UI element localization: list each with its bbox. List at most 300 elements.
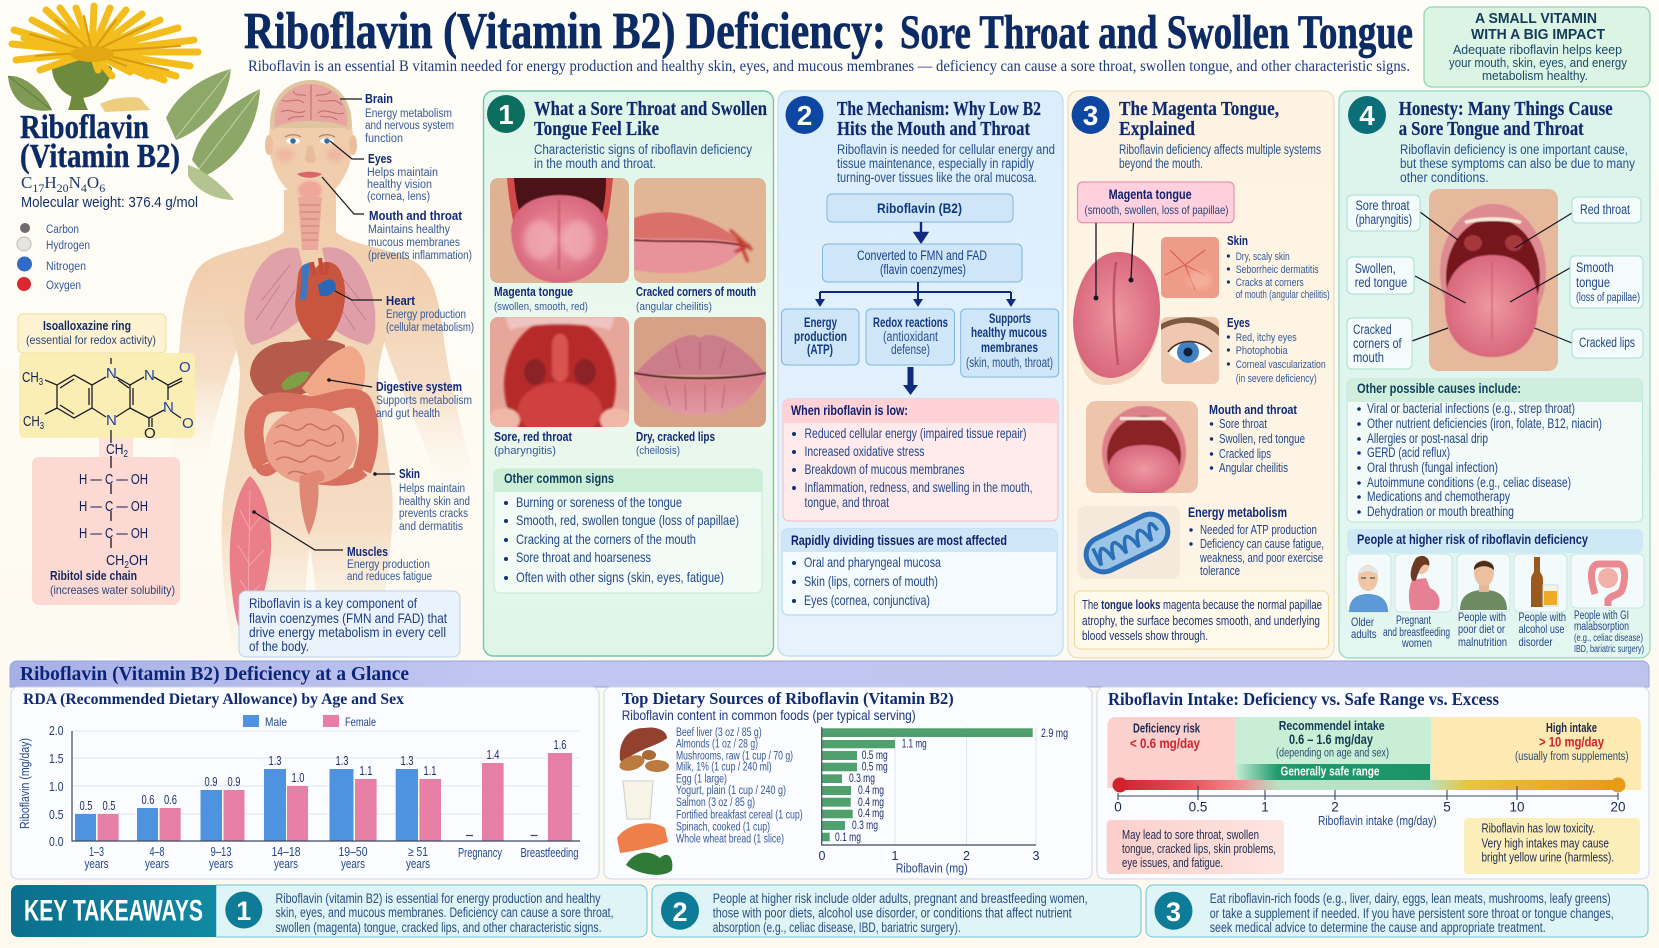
panel: ribitol side chain: (increases water solubility) (50, 583, 175, 597)
photo: dry cracked lips (634, 317, 766, 427)
intake scale: Riboflavin intake (mg/day) (1318, 814, 1436, 828)
sources bar chart: 0.1 mg (835, 832, 861, 844)
note: deficiency effects: May lead to sore throat, swollen (1122, 828, 1259, 842)
flow: mucous membranes: healthy mucous (971, 325, 1047, 340)
text: energy metabolism: tolerance (1200, 564, 1240, 578)
rda legend: Female (345, 715, 376, 729)
zone: deficiency risk (1107, 717, 1235, 788)
heading: riboflavin: (Vitamin B2) (20, 138, 180, 175)
molecule: isoalloxazine ring structure: CH (22, 369, 44, 386)
label: skin: Skin (399, 467, 420, 481)
panel: dietary sources (604, 687, 1092, 879)
zone: high intake: High intake (1546, 721, 1597, 735)
icon: pregnant woman (1395, 554, 1452, 612)
molecule: isoalloxazine ring structure: O (144, 425, 156, 442)
legend: atoms: Oxygen (46, 280, 81, 292)
molecule: isoalloxazine ring structure (19, 353, 195, 548)
flow: energy production: production (794, 329, 847, 344)
caption: sore red throat (494, 430, 573, 457)
flow: conversion box: Converted to FMN and FAD (857, 248, 987, 263)
takeaway 1 (216, 885, 647, 937)
panel 2 intro: tissue maintenance, especially in rapidly (837, 156, 1034, 171)
flow: riboflavin box (827, 194, 1013, 222)
sources bar chart: 0.4 mg (858, 808, 884, 820)
flow: energy production (782, 309, 859, 365)
chemical formula and molecular weight: C (21, 173, 32, 192)
callout: a small vitamin (1424, 7, 1650, 87)
rda bar chart: years (84, 856, 109, 871)
label: red throat (1572, 197, 1641, 223)
caption: gi malabsorption (1574, 610, 1644, 655)
callout: a small vitamin: WITH A BIG IMPACT (1471, 26, 1605, 43)
flow: conversion box (822, 244, 1022, 282)
text: eyes: (in severe deficiency) (1236, 373, 1317, 385)
food labels: Milk, 1% (1 cup / 240 ml) (676, 762, 772, 774)
icon: older adults (1346, 554, 1391, 612)
flow: redox reactions: defense) (891, 342, 930, 357)
box: rapidly dividing tissues: Eyes (cornea, conjunctiva) (804, 592, 930, 608)
caption: magenta tongue: Magenta tongue (494, 285, 573, 299)
label: smooth tongue: (loss of papillae) (1576, 292, 1640, 304)
rda bar chart: 0.0 (49, 835, 64, 849)
panel 4 heading: a Sore Tongue and Throat (1399, 118, 1584, 140)
caption: pregnant: women (1401, 638, 1432, 650)
rda bar chart: 0.5 (49, 808, 64, 822)
label: heart: Heart (386, 294, 416, 308)
food labels: Fortified breakfast cereal (1 cup) (676, 809, 803, 821)
text: energy metabolism: Deficiency can cause fatigue, (1200, 537, 1324, 551)
intake scale: 5 (1443, 800, 1451, 815)
panel 3 intro: Riboflavin deficiency affects multiple systems (1119, 142, 1321, 157)
label: sore throat: Sore throat (1356, 198, 1410, 213)
caption: alcohol: alcohol use (1518, 622, 1565, 636)
sources bar chart: 0.4 mg (858, 785, 884, 797)
chemical formula and molecular weight: 6 (99, 181, 105, 195)
flow: riboflavin box: Riboflavin (B2) (877, 200, 962, 216)
zone: recommended intake: 0.6 – 1.6 mg/day (1289, 731, 1373, 747)
box: rapidly dividing tissues (782, 529, 1057, 615)
panel 3 intro (1119, 142, 1321, 171)
takeaway 1: skin, eyes, and mucous membranes. Deficiency can cause a sore throat, (276, 905, 614, 920)
label: digestive system: Supports metabolism (376, 395, 472, 407)
molecule: isoalloxazine ring structure: CH (23, 413, 45, 430)
photo: sore red throat (490, 317, 629, 427)
callout: flavin coenzymes: Riboflavin is a key component of (249, 595, 417, 611)
food labels: Salmon (3 oz / 85 g) (676, 797, 755, 809)
rda legend (243, 715, 376, 729)
photo: eye (1161, 317, 1219, 384)
rda bar chart (18, 724, 580, 871)
panel 3 heading: Explained (1119, 118, 1196, 140)
text: skin (1227, 234, 1330, 301)
caption: poor diet: poor diet or (1458, 622, 1505, 636)
label: cracked corners of mouth: Cracked (1353, 322, 1392, 337)
caption: magenta tongue (494, 285, 588, 313)
sources bar chart: 0.5 mg (862, 762, 888, 774)
caption: poor diet: People with (1458, 610, 1506, 624)
panel: intake ranges (1097, 687, 1649, 879)
sources bar chart: 1 (892, 849, 899, 863)
panel 4 intro (1400, 142, 1635, 185)
panel 4 intro: other conditions. (1400, 170, 1489, 185)
panel 2 heading: Hits the Mouth and Throat (837, 118, 1030, 140)
chemical formula and molecular weight: 20 (57, 181, 69, 195)
panel 1 intro: Characteristic signs of riboflavin deficiency (534, 142, 752, 157)
sources bar chart: 0.5 mg (862, 750, 888, 762)
note: low toxicity: bright yellow urine (harmless). (1482, 851, 1614, 865)
takeaway 3: seek medical advice to determine the cause and appropriate treatment. (1210, 920, 1546, 935)
rda bar chart: 0.6 (164, 793, 177, 807)
caption: older adults (1351, 615, 1377, 641)
text: energy metabolism (1188, 505, 1324, 578)
box: other common signs: Smooth, red, swollen tongue (loss of papillae) (516, 512, 739, 528)
title: Riboflavin (Vitamin B2) Deficiency: (244, 3, 886, 60)
panel 2 heading: The Mechanism: Why Low B2 (837, 98, 1041, 120)
caption: pregnant: and breastfeeding (1383, 627, 1450, 639)
chemical formula and molecular weight: 17 (32, 181, 44, 195)
caption: poor diet (1458, 610, 1507, 649)
label: eyes: (cornea, lens) (367, 191, 430, 203)
panel: ribitol side chain: H — C — OH (79, 525, 148, 542)
flow: redox reactions: Redox reactions (873, 315, 948, 330)
box: other possible causes (1347, 379, 1642, 522)
molecule: isoalloxazine ring structure: O (179, 359, 191, 376)
label: brain: Energy metabolism (365, 108, 452, 120)
label: brain (365, 92, 454, 145)
takeaway 1: 1 (236, 896, 251, 926)
rda bar chart: 1.6 (554, 738, 567, 752)
panel: ribitol side chain: 2 (124, 560, 129, 571)
box: other possible causes: Allergies or post-nasal drip (1367, 431, 1488, 446)
legend: atoms: Hydrogen (46, 240, 90, 252)
takeaway 1: Riboflavin (vitamin B2) is essential for energy production and healthy (276, 891, 601, 906)
illustration: magenta tongue (1073, 223, 1160, 385)
rda heading: RDA (Recommended Dietary Allowance) by Age and Sex (23, 691, 404, 708)
text: skin: Skin (1227, 234, 1248, 248)
rda bar chart: years (209, 856, 233, 871)
label: skin (399, 467, 470, 533)
rda bar chart: Riboflavin (mg/day) (18, 738, 32, 829)
rda bar chart: 1.0 (49, 780, 64, 794)
text: mouth and throat: Swollen, red tongue (1219, 432, 1305, 446)
takeaway 2: 2 (672, 897, 688, 927)
panel 2: the mechanism (778, 91, 1063, 656)
caption: alcohol: People with (1518, 610, 1566, 624)
rda bar chart: 1.0 (292, 771, 305, 785)
illustration: mitochondrion (1077, 505, 1180, 581)
caption: dry cracked lips: Dry, cracked lips (636, 430, 715, 444)
caption: magenta tongue: (swollen, smooth, red) (494, 301, 588, 313)
caption: gi malabsorption: malabsorption (1574, 621, 1629, 633)
sources bar chart: 0.3 mg (849, 773, 875, 785)
box: when riboflavin is low: Increased oxidative stress (804, 443, 924, 459)
rda bar chart: years (274, 856, 298, 871)
panel 3 heading: The Magenta Tongue, (1119, 98, 1279, 120)
arrow: to low riboflavin (903, 367, 918, 395)
zone: recommended intake: Recommendel intake (1279, 719, 1385, 733)
label: cracked corners of mouth: mouth (1353, 350, 1384, 365)
label: brain: and nervous system (365, 120, 454, 132)
rda bar chart: 14–18 (272, 844, 300, 859)
zone: deficiency risk: < 0.6 mg/day (1130, 735, 1200, 751)
box: other possible causes: Other possible causes include: (1357, 380, 1521, 396)
panel 4 intro: Riboflavin deficiency is one important cause, (1400, 142, 1628, 157)
molecule: isoalloxazine ring structure: N (163, 399, 174, 416)
sources bar chart (819, 727, 1068, 876)
box: other common signs (494, 469, 762, 593)
panel 1 heading: Tongue Feel Like (534, 118, 659, 140)
leader lines: mouth labels (1412, 212, 1572, 343)
food labels: Almonds (1 oz / 28 g) (676, 739, 758, 751)
label: muscles (347, 545, 432, 583)
intake heading: Riboflavin Intake: Deficiency vs. Safe Range vs. Excess (1108, 689, 1499, 709)
rda bar chart: 0.9 (228, 775, 241, 789)
box: other common signs: Sore throat and hoarseness (516, 549, 651, 565)
rda bar chart: Pregnancy (458, 845, 502, 860)
rda bar chart: 0.5 (102, 799, 116, 813)
label: heart: Energy production (386, 309, 466, 321)
illustration: human anatomy (172, 80, 475, 650)
photo: skin (1161, 237, 1219, 298)
box: other possible causes: GERD (acid reflux) (1367, 445, 1450, 460)
badge 2: 2 (797, 100, 812, 131)
caption: gi malabsorption: People with GI (1574, 610, 1629, 622)
callout: why the tongue looks magenta: atrophy, the surface becomes smooth, and underlying (1082, 614, 1320, 628)
rda bar chart: 4–8 (150, 844, 164, 859)
caption: older adults: adults (1351, 627, 1377, 641)
box: when riboflavin is low (783, 399, 1058, 521)
section heading: at a glance (10, 661, 1649, 687)
intake scale: 10 (1509, 800, 1525, 815)
photo: mouth and throat (1086, 401, 1198, 498)
panel: rda chart (11, 687, 599, 879)
rda bar chart: ≥ 51 (408, 844, 428, 859)
header: people at higher risk (1347, 529, 1643, 553)
box: rapidly dividing tissues: Skin (lips, corners of mouth) (804, 573, 938, 589)
rda bar chart: years (341, 856, 365, 871)
panel 1: what a sore throat feels like (484, 91, 774, 656)
takeaway 3: 3 (1166, 897, 1181, 927)
molecule: isoalloxazine ring structure: 3 (39, 377, 43, 388)
callout: flavin coenzymes: flavin coenzymes (FMN and FAD) that (249, 610, 447, 626)
callout: flavin coenzymes: drive energy metabolism in every cell (249, 624, 446, 640)
flow: mucous membranes: Supports (989, 311, 1031, 326)
label: red throat: Red throat (1580, 202, 1630, 217)
chemical formula and molecular weight: H (44, 173, 57, 192)
callout: a small vitamin: your mouth, skin, eyes, and energy (1449, 55, 1627, 70)
caption: cracked corners (636, 285, 756, 313)
flow: redox reactions (866, 309, 954, 365)
legend: atoms: Nitrogen (46, 261, 86, 273)
takeaway 1: swollen (magenta) tongue, cracked lips, and other characteristic signs. (276, 920, 602, 935)
takeaway 2: absorption (e.g., celiac disease, IBD, bariatric surgery). (713, 920, 961, 935)
box: other possible causes: Dehydration or mouth breathing (1367, 504, 1514, 519)
box: other possible causes: Medications and chemotherapy (1367, 489, 1510, 504)
box: other common signs: Burning or soreness of the tongue (516, 494, 682, 510)
caption: sore red throat: Sore, red throat (494, 430, 573, 444)
panel 2 intro: turning-over tissues like the oral mucosa. (837, 170, 1037, 185)
text: skin: Seborrheic dermatitis (1236, 264, 1319, 276)
photo: magenta tongue (490, 178, 629, 283)
molecule: isoalloxazine ring structure: 3 (40, 421, 44, 432)
label: swollen red tongue: Swollen, (1355, 261, 1396, 276)
rda bar chart: 1.1 (424, 764, 437, 778)
label: mouth and throat (368, 209, 472, 262)
box: when riboflavin is low: Inflammation, redness, and swelling in the mouth, (804, 479, 1032, 495)
box: other common signs: Other common signs (504, 470, 614, 486)
box: other possible causes: Oral thrush (fungal infection) (1367, 460, 1498, 475)
zone: deficiency risk: Deficiency risk (1133, 722, 1200, 736)
intake scale: 0.5 (1189, 800, 1207, 815)
rda bar chart: 1–3 (89, 844, 104, 859)
isoalloxazine ring label: (essential for redox activity) (26, 333, 156, 347)
food labels: Egg (1 large) (676, 773, 727, 785)
panel: ribitol side chain: OH (129, 552, 148, 569)
text: skin: of mouth (angular cheilitis) (1236, 289, 1330, 301)
badge 4 (1348, 96, 1386, 134)
label: digestive system: Digestive system (376, 380, 462, 394)
arrow: to conversion (915, 222, 927, 242)
sources heading: Top Dietary Sources of Riboflavin (Vitamin B2) (622, 689, 954, 708)
chemical formula and molecular weight: N (69, 173, 81, 192)
panel 4: many things cause a sore tongue (1339, 91, 1650, 658)
caption: dry cracked lips (636, 430, 715, 457)
caption: alcohol: disorder (1518, 635, 1552, 649)
panel 1 intro: in the mouth and throat. (534, 156, 656, 171)
isoalloxazine ring label (18, 314, 166, 353)
label: skin: and dermatitis (399, 521, 463, 533)
text: skin: Dry, scaly skin (1236, 251, 1290, 263)
rda legend: Male (265, 715, 287, 729)
label: cracked corners of mouth: corners of (1353, 336, 1402, 351)
legend: atoms (17, 223, 90, 292)
panel 3: the magenta tongue (1068, 91, 1334, 658)
caption: poor diet: malnutrition (1458, 635, 1507, 649)
label: smooth tongue: Smooth (1576, 260, 1614, 275)
rda bar chart: 19–50 (338, 844, 368, 859)
box: other common signs: Often with other signs (skin, eyes, fatigue) (516, 569, 724, 585)
intake scale: 0 (1114, 800, 1122, 815)
sources bar chart: Riboflavin (mg) (896, 862, 968, 876)
callout: flavin coenzymes: of the body. (249, 638, 309, 654)
zone: recommended intake (1235, 717, 1431, 790)
panel 2 heading (837, 98, 1041, 140)
label: magenta tongue: (smooth, swollen, loss of papillae) (1084, 203, 1228, 217)
intake scale: 2 (1331, 800, 1339, 815)
label: mouth and throat: (prevents inflammation) (368, 250, 472, 262)
text: mouth and throat: Mouth and throat (1209, 403, 1298, 417)
takeaway 2 (652, 885, 1141, 937)
molecule: isoalloxazine ring structure: N (106, 412, 117, 429)
rda bar chart: 1.5 (49, 752, 64, 766)
molecule: isoalloxazine ring structure: N (106, 365, 117, 382)
label: skin: Helps maintain (399, 483, 465, 495)
flow: mucous membranes: (skin, mouth, throat) (966, 355, 1053, 370)
title (244, 3, 1413, 60)
note: deficiency effects: tongue, cracked lips, skin problems, (1122, 842, 1276, 856)
intake scale: 1 (1261, 800, 1269, 815)
label: digestive system (376, 380, 472, 420)
intake scale (1112, 778, 1626, 828)
badge 4: 4 (1359, 100, 1375, 131)
intake scale: 20 (1610, 800, 1626, 815)
note: deficiency effects: eye issues, and fatigue. (1122, 856, 1223, 870)
rda bar chart: years (145, 856, 169, 871)
label: brain: function (365, 133, 403, 145)
text: eyes: Photophobia (1236, 345, 1288, 357)
sources bar chart: 3 (1033, 849, 1040, 863)
subtitle: Riboflavin is an essential B vitamin needed for energy production and healthy skin, eyes, and mucous membranes — deficiency can cause a sore throat, swollen tongue, and other characteristic signs. (248, 58, 1410, 75)
text: mouth and throat: Sore throat (1219, 417, 1267, 431)
sources bar chart: 2 (963, 849, 970, 863)
photo: open mouth with tongue (1429, 189, 1558, 371)
rda bar chart: 1.3 (268, 754, 282, 768)
flow: mucous membranes: membranes (981, 340, 1038, 355)
chemical formula and molecular weight: Molecular weight: 376.4 g/mol (21, 194, 198, 211)
callout: a small vitamin: A SMALL VITAMIN (1475, 10, 1597, 27)
note: low toxicity: Very high intakes may cause (1482, 837, 1609, 851)
takeaway 3 (1146, 885, 1648, 937)
zone: high intake: > 10 mg/day (1539, 734, 1604, 750)
sources bar chart: 1.1 mg (902, 739, 927, 751)
label: cracked lips (1572, 329, 1643, 358)
label: smooth tongue: tongue (1576, 275, 1610, 290)
text: mouth and throat: Cracked lips (1219, 447, 1271, 461)
molecule: isoalloxazine ring structure: N (144, 367, 155, 384)
flow: redox reactions: (antioxidant (883, 329, 938, 344)
label: heart: (cellular metabolism) (386, 322, 474, 334)
caption: pregnant: Pregnant (1396, 615, 1432, 627)
icons: foods (617, 727, 672, 875)
label: skin: healthy skin and (399, 496, 470, 508)
chemical formula and molecular weight (21, 173, 198, 211)
section heading: at a glance: Riboflavin (Vitamin B2) Deficiency at a Glance (20, 663, 409, 685)
sources subtitle: Riboflavin content in common foods (per typical serving) (622, 708, 916, 723)
flow: mucous membranes (961, 309, 1059, 377)
note: low toxicity (1464, 818, 1640, 874)
flow: conversion box: (flavin coenzymes) (880, 262, 966, 277)
caption: cracked corners: (angular cheilitis) (636, 301, 712, 313)
caption: pregnant (1383, 615, 1450, 650)
box: when riboflavin is low: tongue, and throat (804, 494, 889, 510)
panel 4 heading (1399, 98, 1613, 140)
sources bar chart: 2.9 mg (1041, 728, 1068, 740)
header: people at higher risk: People at higher risk of riboflavin deficiency (1357, 531, 1588, 547)
food labels: Spinach, cooked (1 cup) (676, 821, 770, 833)
food labels (676, 727, 803, 846)
label: sore throat: (pharyngitis) (1356, 212, 1412, 227)
text: energy metabolism: weakness, and poor exercise (1199, 551, 1323, 565)
food labels: Whole wheat bread (1 slice) (676, 834, 784, 846)
note: deficiency effects (1107, 820, 1284, 874)
label: eyes: Helps maintain (367, 167, 438, 179)
panel: ribitol side chain: H — C — OH (79, 498, 148, 515)
chemical formula and molecular weight: 4 (81, 181, 87, 195)
panel: ribitol side chain: Ribitol side chain (50, 569, 137, 583)
panel: ribitol side chain: CH (106, 552, 128, 569)
box: other possible causes: Viral or bacterial infections (e.g., strep throat) (1367, 401, 1575, 416)
text: eyes: Corneal vascularization (1236, 359, 1326, 371)
label: cracked corners of mouth (1347, 318, 1412, 369)
callout: why the tongue looks magenta (1074, 591, 1328, 649)
isoalloxazine ring label: Isoalloxazine ring (43, 319, 131, 333)
text: skin: Cracks at corners (1236, 277, 1304, 289)
rda bar chart: 1.4 (486, 748, 500, 762)
sources bar chart: 0.4 mg (858, 797, 884, 809)
box: other common signs: Cracking at the corners of the mouth (516, 531, 696, 547)
caption: sore red throat: (pharyngitis) (494, 445, 556, 457)
zone: high intake: (usually from supplements) (1515, 751, 1629, 763)
